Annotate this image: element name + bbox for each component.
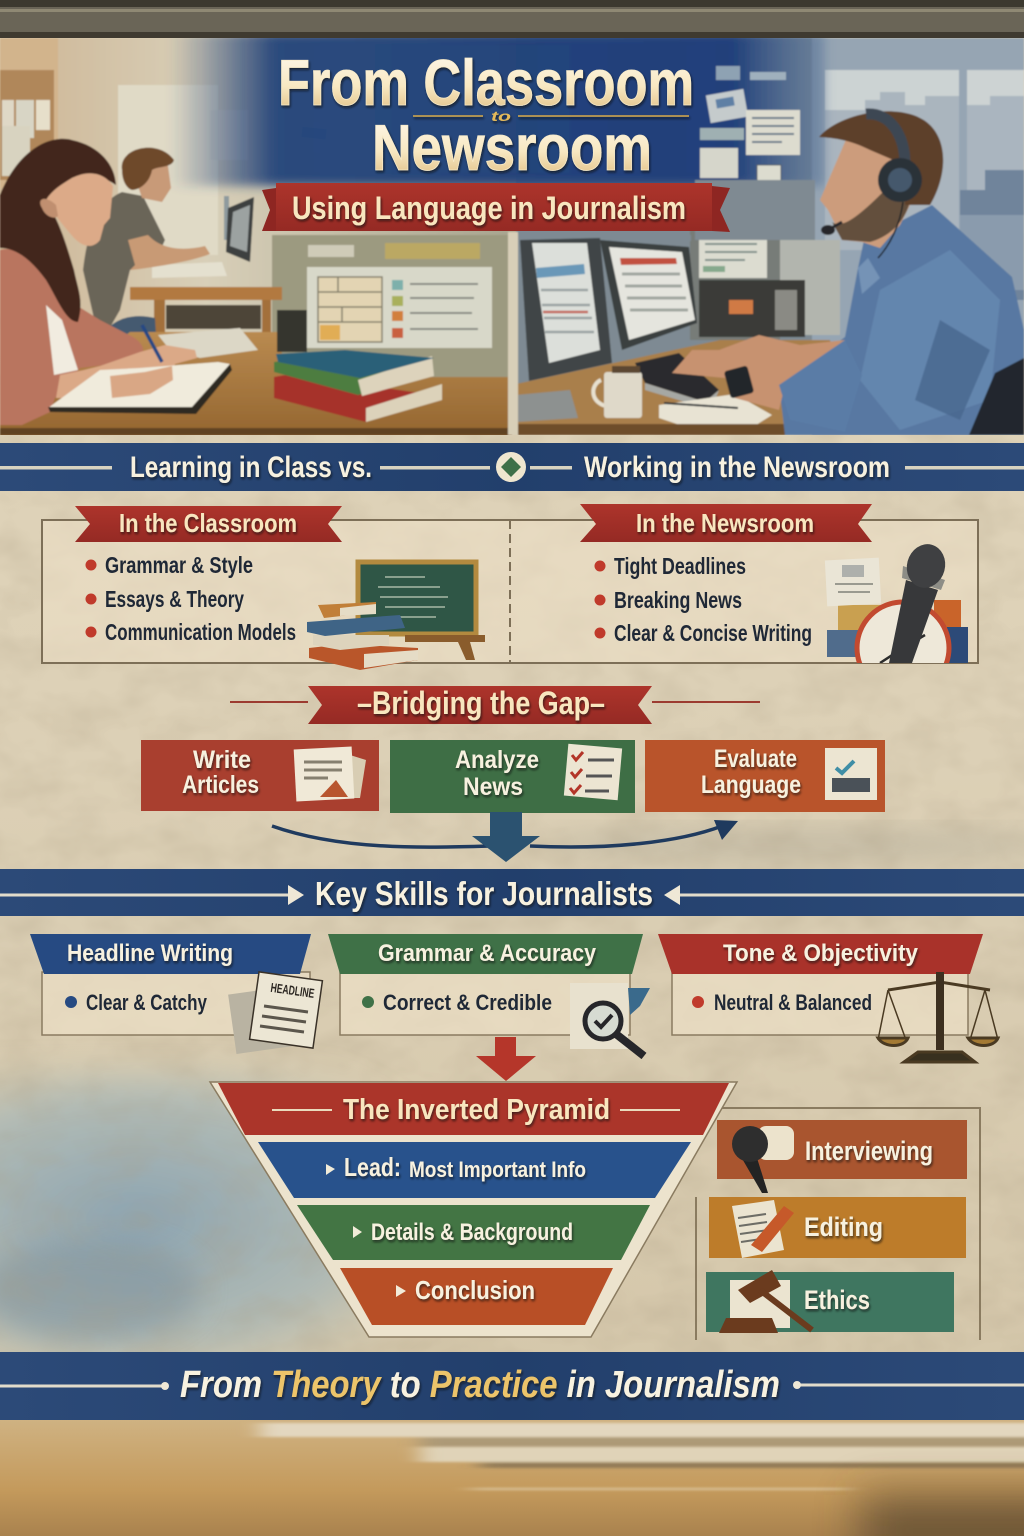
layer: lead [258,1142,691,1198]
layer: title [218,1083,729,1135]
skill: tone and objectivity: Neutral & Balanced [714,990,872,1015]
layer: conclusion [340,1268,613,1325]
footer band [0,1352,1024,1420]
wooden desk [0,332,512,438]
ribbon: in the newsroom: In the Newsroom [636,508,814,538]
heading ribbon: bridging the gap: –Bridging the Gap– [357,685,605,721]
panel: newsroom wall and window [516,38,1024,438]
icon: clock, paper and microphone [825,558,968,663]
document on desk [158,328,258,358]
item: editing: Editing [804,1212,883,1242]
item: ethics: Ethics [804,1285,870,1315]
section band: learning vs working [0,443,1024,491]
title: Newsroom [372,111,652,184]
layer: conclusion: Conclusion [415,1275,535,1305]
inverted pyramid [210,1082,737,1337]
window [0,38,58,188]
card: evaluate language [645,740,885,812]
panel: classroom vs newsroom [41,504,979,670]
item: interviewing [717,1120,967,1193]
title: to [491,108,512,124]
arrow to pyramid [476,1037,536,1081]
icon: chalkboard and books [307,562,485,670]
layer: details: Details & Background [371,1219,573,1246]
section band: learning vs working: Learning in Class vs. [130,451,372,484]
item: ethics [706,1270,954,1333]
title [278,46,694,184]
ribbon: in the classroom: In the Classroom [119,508,297,538]
ribbon: in the classroom [75,506,342,542]
mug [593,366,642,418]
woman [0,139,232,425]
subtitle ribbon [262,183,730,232]
skill: tone and objectivity: Tone & Objectivity [723,940,919,967]
section band: key skills: Key Skills for Journalists [315,875,653,912]
list: newsroom: Breaking News [614,587,742,613]
section band: key skills [0,869,1024,916]
item: editing [709,1197,966,1258]
list: newsroom [594,553,812,646]
card: analyze news: Analyze [455,746,539,774]
list: classroom [86,552,296,645]
journalist [672,111,1024,435]
hero illustration [0,32,1024,438]
icon: checklist [564,744,622,800]
card: evaluate language: Language [701,771,801,799]
skill: tone and objectivity [658,934,998,1062]
icon: newspapers: HEADLINE [270,980,316,1001]
list: classroom: Communication Models [105,619,296,645]
list: classroom: Essays & Theory [105,586,244,612]
subtitle ribbon: Using Language in Journalism [292,190,686,226]
title: From Classroom [278,46,694,119]
icon: article [294,747,366,801]
card: write articles [141,740,379,811]
card: analyze news: News [463,773,523,801]
icon: evaluation card [825,748,877,800]
screen board [277,267,492,352]
layer: lead: Most Important Info [409,1157,586,1182]
layer: lead: Lead: [344,1152,401,1182]
card: evaluate language: Evaluate [714,745,797,773]
top strip [0,0,1024,38]
layer: title: The Inverted Pyramid [343,1094,610,1126]
skill: grammar and accuracy: Grammar & Accuracy [378,940,597,967]
panel: practice skills [696,1108,980,1340]
list: newsroom: Tight Deadlines [614,553,746,579]
layer: details [297,1205,650,1260]
wall notes [695,66,815,240]
skill: grammar and accuracy [328,934,650,1056]
ribbon: in the newsroom [580,504,872,542]
skill: headline writing: Clear & Catchy [86,990,208,1015]
card: analyze news [390,740,635,813]
icon: microphone [889,540,950,663]
skill: headline writing [30,934,322,1054]
card: write articles: Write [193,746,251,774]
title backdrop [170,32,825,186]
heading ribbon: bridging the gap [230,685,760,724]
journalist desk and monitors [516,235,860,435]
list: classroom: Grammar & Style [105,552,253,578]
skill: grammar and accuracy: Correct & Credible [383,990,552,1015]
section band: learning vs working: Working in the Newsroom [584,451,890,484]
card: write articles: Articles [182,771,259,799]
scene: classroom [0,38,516,378]
books [274,350,442,422]
list: newsroom: Clear & Concise Writing [614,620,812,646]
icon: diamond [496,452,526,482]
icon: scales [878,972,998,1062]
flow arrows [272,812,738,862]
icon: magnifier [570,983,650,1056]
skill: headline writing: Headline Writing [67,940,233,967]
footer band: From Theory to Practice in Journalism [180,1364,780,1406]
item: interviewing: Interviewing [805,1136,933,1166]
student in back [83,148,282,345]
icon: newspapers [228,972,322,1054]
